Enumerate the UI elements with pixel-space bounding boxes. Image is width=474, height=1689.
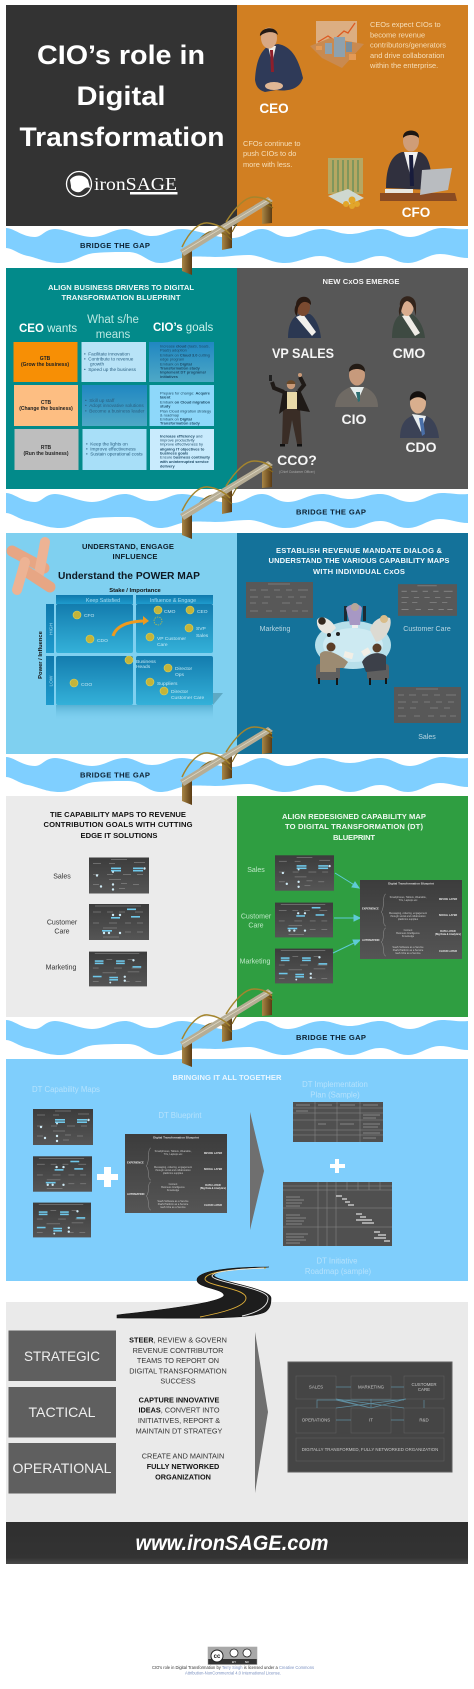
icon: plus	[97, 1167, 118, 1187]
blueprint diagram: Business Intelligence	[396, 932, 420, 935]
subheading: Power Map: Understand the POWER MAP	[58, 571, 200, 582]
chart: power matrix: CEO	[197, 609, 208, 615]
text: strategic: DIGITAL TRANSFORMATION	[129, 1366, 227, 1376]
diagram: networked organization: DIGITALLY TRANSFORMED, FULLY NETWORKED ORGANIZATION	[302, 1447, 438, 1452]
panel: revenue mandate	[237, 533, 468, 754]
chart: power matrix: Heads	[136, 664, 151, 670]
diagram: networked organization: SALES	[309, 1384, 323, 1390]
heading: CONTRIBUTION GOALS WITH CUTTING	[44, 820, 193, 829]
arrow: chevron	[250, 1112, 264, 1230]
blueprint diagram: DATA LAYER	[440, 930, 456, 933]
panel: bringing it all together	[6, 1059, 468, 1281]
row: GTB: edge program	[160, 356, 184, 362]
row: GTB: • Speed up the business	[84, 367, 137, 372]
chart: power matrix: COO	[81, 682, 92, 688]
label: DT Capability Maps: DT Capability Maps	[32, 1085, 100, 1094]
row: GTB: initiatives	[160, 374, 178, 379]
map labels: Customer	[47, 920, 78, 926]
figure: CMO	[392, 296, 425, 338]
row: RTB: improve productivity	[160, 438, 195, 442]
row: CTB: study	[160, 404, 171, 408]
blueprint diagram: DATA LAYER	[205, 1184, 221, 1187]
icon: bridge 4	[180, 989, 273, 1067]
text: CFOs continue: more with less.	[243, 160, 292, 169]
panel: power map	[6, 533, 237, 754]
license badge: BY	[232, 1660, 236, 1664]
map labels: Sales	[53, 874, 71, 880]
row: RTB: business goals	[160, 450, 188, 456]
box: tactical: TACTICAL	[28, 1404, 96, 1420]
row: GTB: • Facilitate innovation	[84, 352, 130, 356]
logo: ironSAGE: ironSAGE	[94, 174, 177, 194]
row: RTB: Increase efficiency and	[160, 434, 202, 438]
chart: power matrix: LOW	[48, 675, 54, 686]
license badge	[208, 1647, 257, 1664]
blueprint diagram: IaaS Infra as a Service	[160, 1206, 186, 1209]
map labels: Customer Care	[403, 626, 451, 633]
text: CFOs continue: CFOs continue to	[243, 139, 301, 148]
text: tactical	[136, 1396, 223, 1436]
map labels	[260, 626, 451, 741]
chart: power matrix: Keep Satisfied	[86, 598, 120, 604]
axis: power influence: Power / Influence	[38, 630, 44, 679]
label: DT Blueprint: DT Blueprint	[158, 1111, 202, 1120]
blueprint diagram: Content	[169, 1183, 178, 1186]
row: GTB: Embark on Cloud 3.0 cutting	[160, 352, 210, 358]
blueprint diagram: SaaS Software as a Service	[157, 1200, 189, 1203]
heading: ALIGN BUSINESS DRIVERS TO DIGITAL	[48, 283, 194, 292]
row: GTB	[14, 342, 214, 382]
map labels: Care	[54, 928, 70, 936]
chart: initiative roadmap	[283, 1182, 392, 1246]
label: CDO: CDO	[405, 439, 437, 455]
blueprint diagram: Smartphones, Tablets, Wearable,	[155, 1150, 192, 1153]
label: bridge the gap 4: BRIDGE THE GAP	[296, 1033, 366, 1042]
text: strategic	[129, 1336, 227, 1386]
blueprint diagram: platforms supplies	[398, 918, 419, 921]
map: sales	[89, 858, 149, 894]
figure: CEO	[255, 28, 303, 92]
icon: growth chart	[310, 21, 364, 68]
chart: power matrix: CFO	[84, 613, 95, 619]
chart: power matrix: VP Customer	[157, 636, 186, 642]
diagram: networked organization	[288, 1362, 452, 1472]
label: initiative roadmap: Roadmap (sample)	[305, 1267, 372, 1276]
row: CTB: • Adopt innovative solutions	[85, 403, 144, 408]
row: RTB: aligning IT objectives to	[160, 446, 205, 452]
capability map: sales	[394, 687, 461, 723]
map: marketing	[33, 1203, 91, 1237]
logo: ironSAGE	[66, 172, 178, 196]
heading: NEW CxOS EMERGE	[322, 277, 400, 286]
icon: bridge 3	[180, 727, 273, 805]
row: GTB: Increase cloud (IaaS, SaaS,	[160, 344, 210, 348]
table: implementation plan	[293, 1102, 383, 1142]
chart: power matrix: Sales	[196, 633, 209, 639]
chart: power matrix: Director	[175, 666, 192, 672]
label: initiative roadmap: DT Initiative	[316, 1256, 358, 1266]
row: CTB: (Change the business)	[19, 406, 73, 412]
row: CTB: talent	[160, 394, 171, 400]
map labels: Care	[248, 922, 264, 930]
arrow: influence shift	[113, 621, 146, 636]
map labels: Sales	[247, 867, 265, 874]
map labels: Sales	[418, 734, 436, 741]
row: RTB: delivery	[160, 464, 176, 468]
row: GTB: Transformation study	[160, 366, 201, 370]
panel: business drivers	[6, 268, 237, 489]
wave: river 1	[6, 228, 468, 263]
row: CTB: Embark on Cloud migration	[160, 400, 211, 404]
text: operational: FULLY NETWORKED	[147, 1462, 219, 1471]
row: GTB: (Grow the business)	[21, 362, 69, 368]
title heading	[20, 40, 224, 152]
blueprint diagram: Digital Transformation Blueprint	[388, 882, 434, 886]
label: CMO: CMO	[393, 345, 425, 361]
box: operational: OPERATIONAL	[12, 1460, 112, 1476]
map labels: Marketing	[46, 964, 76, 972]
map labels	[46, 874, 78, 972]
blueprint diagram: Content	[404, 929, 413, 932]
diagram: networked organization: R&D	[419, 1418, 429, 1422]
text: operational: ORGANIZATION	[155, 1472, 211, 1482]
blueprint diagram: PaaS Platform as a Service	[393, 949, 424, 952]
text: tactical: INITIATIVES, REPORT &	[138, 1416, 220, 1425]
label: implementation plan: DT Implementation	[302, 1080, 368, 1089]
text: strategic: REVENUE CONTRIBUTOR	[133, 1346, 223, 1355]
icon: winding road	[117, 1267, 271, 1318]
heading: BRINGING IT ALL TOGETHER	[172, 1073, 282, 1082]
capability map: marketing	[246, 582, 313, 618]
row: GTB: • Contribute to revenue	[84, 356, 134, 362]
row: CTB: Plan Cloud migration strategy	[160, 408, 211, 414]
title heading: CIO’s role in	[37, 40, 205, 70]
license credit: CIO's role in Digital Transformation by Terry Singh is licensed under a Creative Commons	[152, 1665, 314, 1670]
license badge: cc	[214, 1654, 221, 1660]
illustration: meeting table	[315, 603, 391, 685]
heading: TRANSFORMATION BLUEPRINT	[62, 293, 181, 302]
text: CFOs continue	[243, 139, 301, 169]
text: tactical: CAPTURE INNOVATIVE	[139, 1396, 220, 1404]
label: CCO: CCO?	[277, 452, 317, 468]
label: bridge the gap 3: BRIDGE THE GAP	[80, 770, 150, 780]
blueprint diagram: platforms supplies	[163, 1172, 184, 1175]
column headers	[19, 314, 214, 341]
heading: WITH INDIVIDUAL CxOS	[313, 567, 405, 576]
map labels: Marketing	[260, 626, 290, 633]
heading: BLUEPRINT	[333, 833, 375, 842]
row: RTB: (Run the business)	[23, 451, 69, 457]
text: tactical: IDEAS, CONVERT INTO	[138, 1406, 220, 1414]
panel: levels	[6, 1302, 468, 1522]
license badge: NC	[245, 1660, 250, 1664]
map labels: Customer	[241, 914, 272, 920]
wave: river 2	[6, 493, 468, 528]
box: tactical	[8, 1387, 116, 1438]
license credit: Attribution-NonCommercial 4.0 International License.	[185, 1670, 281, 1676]
text: tactical: MAINTAIN DT STRATEGY	[136, 1426, 223, 1436]
arrow: chevron	[255, 1332, 268, 1493]
blueprint diagram: through social and collaboration	[390, 915, 426, 918]
blueprint diagram: PaaS Platform as a Service	[158, 1203, 189, 1206]
wave: river 3	[6, 757, 468, 792]
diagram: networked organization: CUSTOMER	[411, 1382, 437, 1387]
license credit	[152, 1665, 314, 1676]
heading	[44, 810, 193, 840]
text: operational	[142, 1452, 224, 1482]
row: RTB	[14, 429, 214, 470]
chart: power matrix: Ops	[175, 672, 185, 678]
row: GTB: growth	[90, 362, 104, 366]
arrows: maps to blueprint	[333, 873, 360, 953]
row: CTB: • Skill up staff	[85, 398, 115, 403]
heading	[82, 542, 174, 561]
blueprint diagram: SOCIAL LAYER	[204, 1168, 222, 1171]
diagram: networked organization: IT	[369, 1418, 373, 1422]
diagram: networked organization: MARKETING	[358, 1384, 385, 1390]
column headers: What s/he	[87, 314, 139, 326]
text: CEOs expect: become revenue	[370, 30, 425, 40]
figure: CDO	[400, 391, 439, 438]
blueprint diagram: Business Intelligence	[161, 1186, 185, 1189]
axis: stake importance: Stake / Importance	[109, 588, 162, 594]
heading: UNDERSTAND THE VARIOUS CAPABILITY MAPS	[268, 556, 450, 565]
caption: Chief Customer Officer: (Chief Customer Officer)	[279, 470, 315, 474]
chart: power matrix: Business	[136, 659, 156, 665]
chart: power matrix: Influence & Engage	[150, 598, 196, 604]
figure: CIO	[335, 364, 378, 407]
row: CTB: & roadmap	[160, 412, 179, 418]
map: sales	[275, 855, 334, 891]
label: bridge the gap 2: BRIDGE THE GAP	[296, 508, 366, 516]
panel: title	[6, 5, 237, 226]
heading: TO DIGITAL TRANSFORMATION (DT)	[285, 822, 423, 831]
row: GTB: PaaS) adoption	[160, 348, 187, 352]
blueprint diagram	[360, 880, 462, 959]
box: strategic: STRATEGIC	[24, 1348, 100, 1364]
wave: river 4	[6, 1020, 468, 1055]
row: RTB: RTB	[41, 445, 52, 451]
row: GTB: Embark on Digital	[160, 362, 192, 366]
icon: plus	[330, 1159, 345, 1173]
label: CFO: CFO	[402, 205, 430, 220]
blueprint diagram: CLOUD LAYER	[439, 950, 457, 953]
chart: power matrix: HIGH	[48, 622, 54, 635]
row: GTB: GTB	[40, 356, 51, 362]
text: CEOs expect: CEOs expect CIOs to	[370, 20, 441, 29]
panel: tie capability maps	[6, 796, 237, 1017]
heading	[48, 283, 194, 302]
chart: power matrix: Customer Care	[171, 695, 204, 701]
text: CFOs continue: push CIOs to do	[243, 149, 296, 158]
blueprint diagram: EXPERIENCE	[127, 1160, 144, 1164]
panel: new CxOs	[237, 268, 468, 489]
blueprint diagram: Knowledge	[402, 935, 415, 938]
row: GTB: Implement DT programs/	[160, 370, 207, 374]
text: strategic: STEER, REVIEW & GOVERN	[129, 1336, 227, 1344]
blueprint diagram: DEVICE LAYER	[439, 898, 457, 901]
blueprint diagram: SOCIAL LAYER	[439, 914, 457, 917]
text: strategic: SUCCESS	[160, 1376, 196, 1386]
blueprint diagram: through social and collaboration	[155, 1169, 191, 1172]
blueprint diagram: SaaS Software as a Service	[392, 946, 424, 949]
text: CEOs expect: and drive collaboration	[370, 51, 444, 60]
label: CEO: CEO	[259, 101, 289, 116]
column headers: means	[96, 329, 131, 341]
map: marketing	[89, 952, 147, 986]
row: CTB	[14, 385, 214, 426]
chart: power matrix: Director	[171, 689, 188, 695]
map: sales	[33, 1109, 93, 1145]
diagram: networked organization: OPERATIONS	[302, 1418, 330, 1422]
blueprint diagram: Smartphones, Tablets, Wearable,	[390, 896, 427, 899]
figure: CFO	[380, 130, 457, 201]
heading: ALIGN REDESIGNED CAPABILITY MAP	[282, 812, 426, 821]
chart: power matrix: CMO	[164, 609, 176, 615]
blueprint diagram: TVs, Laptops etc	[164, 1153, 183, 1156]
map labels	[240, 867, 272, 966]
box: operational	[8, 1443, 116, 1494]
title heading: Digital	[76, 81, 166, 111]
heading: EDGE IT SOLUTIONS	[80, 831, 158, 840]
heading: INFLUENCE	[112, 552, 158, 561]
chart: power matrix: Care	[157, 642, 168, 648]
label: VP SALES: VP SALES	[272, 345, 334, 361]
blueprint diagram: DEVICE LAYER	[204, 1152, 222, 1155]
row: RTB: • Sustain operational costs	[86, 452, 143, 456]
row: CTB: CTB	[41, 400, 52, 406]
label: implementation plan	[302, 1080, 368, 1100]
blueprint diagram: (Big Data & Analytics)	[200, 1187, 226, 1190]
row: RTB: Improve effectiveness by	[160, 442, 203, 446]
map: marketing	[275, 949, 333, 983]
heading	[282, 812, 426, 842]
blueprint diagram: EXPERIENCE	[362, 906, 379, 910]
text: CEOs expect: within the enterprise.	[369, 61, 438, 70]
panel: CEO and CFO	[237, 5, 468, 226]
row: RTB: • Improve effectiveness	[86, 446, 136, 452]
blueprint diagram: CLOUD LAYER	[204, 1204, 222, 1207]
row: CTB: Prepare for change: Acquire	[160, 390, 211, 396]
label: CIO: CIO	[342, 411, 367, 427]
map: customer care	[33, 1156, 92, 1192]
figure: VP Sales	[288, 297, 321, 338]
label: implementation plan: Plan (Sample)	[310, 1090, 360, 1100]
figure: CCO	[269, 373, 310, 446]
row: CTB: Embark on Digital	[160, 416, 192, 422]
title heading: Transformation	[20, 122, 224, 152]
heading: ESTABLISH REVENUE MANDATE DIALOG &	[276, 546, 443, 555]
row: RTB: with uninterrupted service	[159, 459, 209, 464]
blueprint diagram: AUTOMATION	[127, 1192, 144, 1196]
blueprint diagram: IaaS Infra as a Service	[395, 952, 421, 955]
diagram: networked organization: CARE	[418, 1387, 430, 1392]
map: customer care	[89, 904, 149, 940]
text: strategic: TEAMS TO REPORT ON	[137, 1356, 219, 1365]
column headers: CIO’s goals	[153, 322, 214, 334]
box: strategic	[8, 1330, 116, 1381]
row: RTB: Ensure business continuity	[160, 454, 211, 460]
label: bridge the gap 1: BRIDGE THE GAP	[80, 241, 150, 250]
blueprint diagram: Knowledge	[167, 1189, 180, 1192]
banner: website	[6, 1522, 468, 1564]
text: operational: CREATE AND MAINTAIN	[142, 1452, 224, 1460]
capability map: customer care	[398, 584, 457, 616]
blueprint diagram: AUTOMATION	[362, 938, 379, 942]
text: CEOs expect	[369, 20, 446, 70]
row: RTB: • Keep the lights on	[86, 442, 128, 446]
icon: bridge 2	[180, 461, 273, 539]
row: CTB: • Become a business leader	[85, 408, 145, 414]
chart: power matrix	[46, 595, 223, 721]
blueprint diagram: Messaging, ordering, engagement	[389, 912, 427, 915]
label: initiative roadmap	[305, 1256, 372, 1276]
blueprint diagram: TVs, Laptops etc	[399, 899, 418, 902]
heading: UNDERSTAND, ENGAGE	[82, 542, 174, 551]
icon: money and coins	[328, 158, 364, 209]
map: customer care	[275, 903, 333, 937]
row: CTB: Transformation study	[160, 420, 201, 426]
heading: TIE CAPABILITY MAPS TO REVENUE	[50, 810, 186, 819]
blueprint diagram: (Big Data & Analytics)	[435, 933, 461, 936]
column headers: CEO wants	[19, 323, 77, 335]
map labels: Marketing	[240, 958, 270, 966]
panel: align blueprint	[237, 796, 468, 1017]
blueprint diagram: Digital Transformation Blueprint	[153, 1136, 199, 1140]
chart: power matrix: CDO	[97, 638, 108, 644]
text: CEOs expect: contributors/generators	[370, 40, 446, 50]
blueprint diagram	[125, 1134, 227, 1213]
chart: power matrix: SVP	[196, 626, 206, 632]
banner: website: www.ironSAGE.com	[136, 1532, 328, 1555]
chart: power matrix: Suppliers	[157, 681, 178, 687]
blueprint diagram: Messaging, ordering, engagement	[154, 1166, 192, 1169]
icon: joined hands	[12, 542, 50, 590]
heading	[268, 546, 450, 576]
icon: bridge 1	[180, 197, 273, 275]
